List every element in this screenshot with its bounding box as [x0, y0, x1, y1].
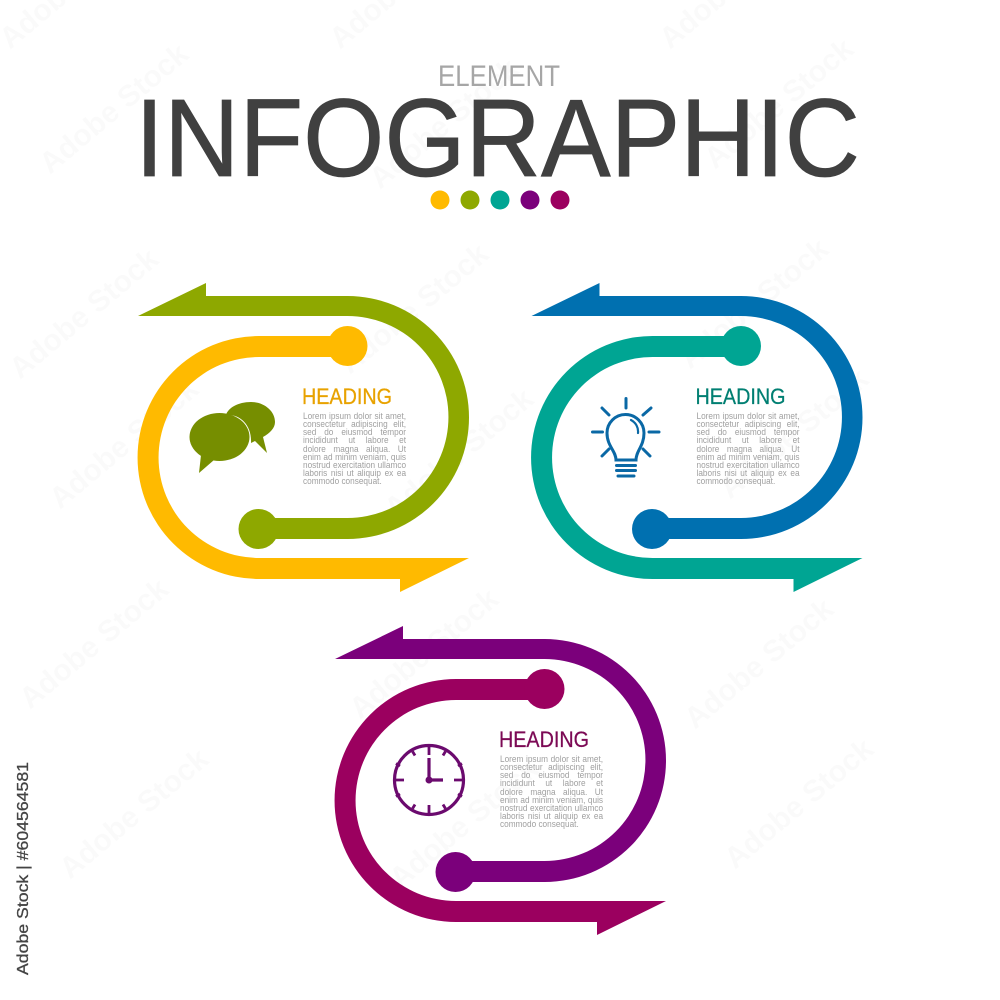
body text: nostrud exercitation ullamco [500, 803, 603, 813]
panel: light bulb (teal and blue arrows) [531, 283, 862, 592]
heading: HEADING [696, 384, 786, 409]
body text: commodo consequat. [500, 819, 579, 829]
body text: incididunt ut labore et [303, 435, 406, 445]
body text: laboris nisi ut aliquip ex ea [696, 468, 800, 478]
body text: consectetur adipiscing elit, [500, 762, 603, 772]
body text: nostrud exercitation ullamco [303, 460, 406, 470]
purple arrow [335, 626, 666, 892]
body text: commodo consequat. [696, 476, 775, 486]
body text: nostrud exercitation ullamco [696, 460, 800, 470]
heading: HEADING [302, 384, 392, 409]
subtitle: ELEMENT: ELEMENT [438, 60, 560, 93]
magenta arrow [335, 669, 666, 935]
body text: enim ad minim veniam, quis [696, 452, 800, 462]
colour dots row [430, 190, 570, 210]
body text: dolore magna aliqua. Ut [303, 444, 406, 454]
body text: incididunt ut labore et [500, 778, 603, 788]
panel: clock (magenta and purple arrows) [335, 626, 666, 935]
body text: commodo consequat. [303, 476, 382, 486]
yellow arrow [138, 326, 469, 592]
icon: clock [394, 746, 464, 814]
green arrow [138, 283, 469, 549]
body text: sed do eiusmod tempor [500, 770, 603, 780]
body text: incididunt ut labore et [696, 435, 800, 445]
body text: dolore magna aliqua. Ut [500, 787, 603, 797]
teal arrow [531, 326, 862, 592]
heading: HEADING [499, 727, 589, 752]
body text [500, 755, 614, 831]
body text: laboris nisi ut aliquip ex ea [500, 811, 603, 821]
blue arrow [532, 283, 862, 549]
body text: consectetur adipiscing elit, [696, 419, 800, 429]
body text [303, 412, 417, 488]
side credit text: Adobe Stock | #604564581 [15, 762, 32, 975]
body text: laboris nisi ut aliquip ex ea [303, 468, 406, 478]
body text: enim ad minim veniam, quis [303, 452, 406, 462]
body text [696, 412, 810, 488]
body text: consectetur adipiscing elit, [303, 419, 406, 429]
title: INFOGRAPHIC: INFOGRAPHIC [135, 77, 860, 200]
icon: light bulb [592, 398, 659, 476]
body text: dolore magna aliqua. Ut [696, 444, 800, 454]
body text: sed do eiusmod tempor [303, 427, 406, 437]
body text: sed do eiusmod tempor [696, 427, 800, 437]
body text: enim ad minim veniam, quis [500, 795, 603, 805]
panel: speech bubbles (yellow and green arrows) [138, 283, 469, 592]
icon: speech bubbles [190, 402, 275, 473]
